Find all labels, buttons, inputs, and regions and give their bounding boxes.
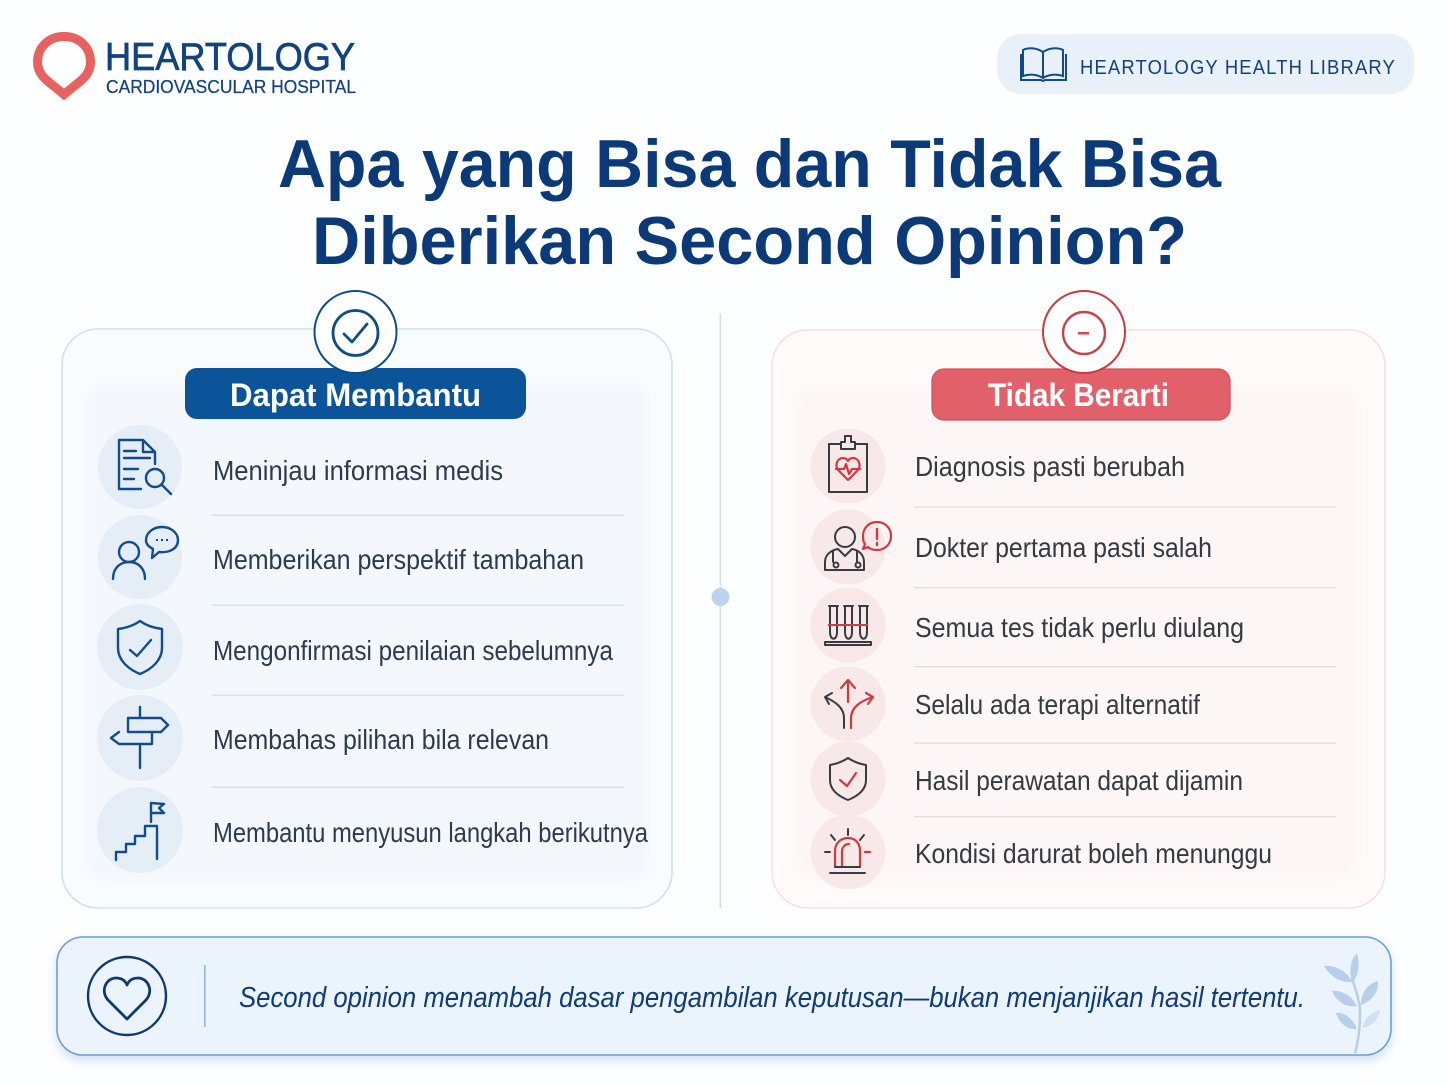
heading: tidak berarti: Tidak Berarti — [988, 377, 1169, 413]
item: membantu menyusun langkah berikutnya — [97, 787, 648, 873]
item: mengonfirmasi penilaian sebelumnya — [97, 604, 613, 690]
item: mengonfirmasi penilaian sebelumnya: Mengonfirmasi penilaian sebelumnya — [213, 635, 613, 666]
item: selalu ada terapi alternatif: Selalu ada terapi alternatif — [915, 689, 1200, 720]
item: membantu menyusun langkah berikutnya: Membantu menyusun langkah berikutnya — [213, 817, 648, 848]
icon: check badge — [314, 291, 396, 373]
icon: logo pin — [38, 36, 90, 94]
item: hasil perawatan dapat dijamin: Hasil perawatan dapat dijamin — [915, 765, 1243, 796]
item: dokter pertama pasti salah — [810, 510, 1212, 584]
item: memberikan perspektif tambahan — [98, 515, 584, 599]
item: kondisi darurat boleh menunggu: Kondisi darurat boleh menunggu — [915, 838, 1272, 869]
logo subtitle: CARDIOVASCULAR HOSPITAL — [106, 77, 356, 97]
row dividers — [914, 506, 1336, 817]
icon: minus badge — [1043, 291, 1125, 373]
item: meninjau informasi medis: Meninjau informasi medis — [213, 455, 503, 486]
icon: heart — [88, 957, 166, 1035]
heading: dapat membantu — [185, 368, 526, 419]
item: diagnosis pasti berubah — [810, 428, 1185, 504]
item: kondisi darurat boleh menunggu — [810, 814, 1272, 890]
panel: tidak berarti — [772, 291, 1385, 908]
title: Diberikan Second Opinion? — [312, 203, 1187, 279]
icon: open book — [1021, 48, 1066, 81]
item: membahas pilihan bila relevan — [97, 695, 549, 781]
item: dokter pertama pasti salah: Dokter pertama pasti salah — [915, 532, 1212, 563]
item: memberikan perspektif tambahan: Memberikan perspektif tambahan — [213, 544, 584, 575]
item: meninjau informasi medis — [98, 425, 503, 509]
callout: conclusion — [57, 937, 1391, 1055]
library label: HEARTOLOGY HEALTH LIBRARY — [1080, 56, 1396, 79]
heading: dapat membantu: Dapat Membantu — [230, 377, 481, 413]
icon: leaf sprig — [1324, 953, 1380, 1053]
panel: dapat membantu — [62, 291, 672, 908]
logo — [38, 36, 356, 97]
center divider — [712, 314, 730, 908]
conclusion text: Second opinion menambah dasar pengambilan keputusan—bukan menjanjikan hasil tertentu. — [239, 982, 1305, 1014]
item: selalu ada terapi alternatif — [810, 666, 1200, 742]
library pill — [997, 34, 1414, 94]
item: semua tes tidak perlu diulang — [810, 588, 1244, 662]
heading: tidak berarti — [932, 369, 1230, 420]
title — [278, 126, 1222, 279]
item: hasil perawatan dapat dijamin — [810, 742, 1243, 816]
logo name: HEARTOLOGY — [105, 36, 355, 79]
row dividers — [212, 514, 624, 788]
title: Apa yang Bisa dan Tidak Bisa — [278, 126, 1222, 202]
item: membahas pilihan bila relevan: Membahas pilihan bila relevan — [213, 724, 549, 755]
item: diagnosis pasti berubah: Diagnosis pasti berubah — [915, 451, 1185, 482]
item: semua tes tidak perlu diulang: Semua tes tidak perlu diulang — [915, 612, 1244, 643]
